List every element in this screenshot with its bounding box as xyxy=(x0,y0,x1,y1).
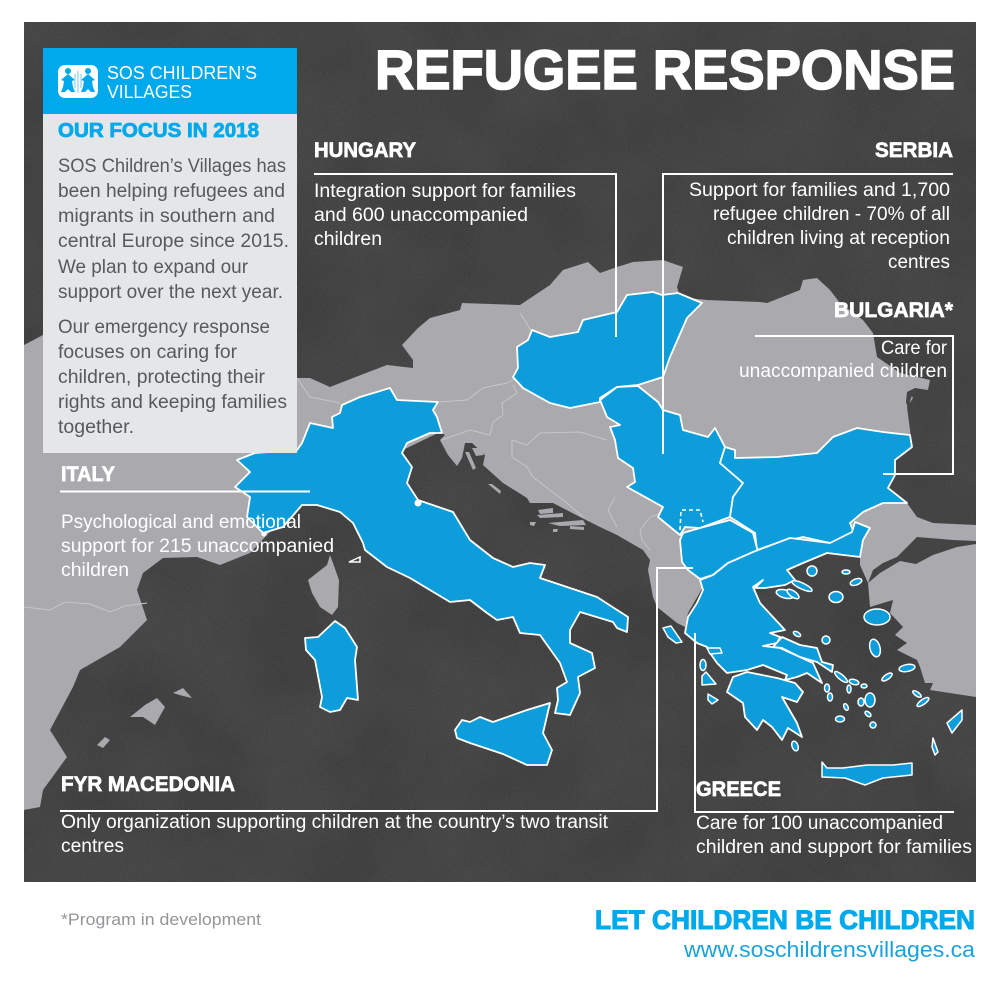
callout: Greece: children and support for families xyxy=(696,837,972,858)
grey land mass xyxy=(24,260,976,810)
intro paragraph: We plan to expand our xyxy=(58,257,249,278)
callout: Bulgaria: unaccompanied children xyxy=(739,361,947,382)
callout: FYR Macedonia: FYR MACEDONIA xyxy=(61,773,235,796)
callout: FYR Macedonia: centres xyxy=(61,836,124,857)
organisation name: SOS CHILDREN’S xyxy=(107,63,257,83)
Elba xyxy=(349,557,360,562)
Corsica xyxy=(308,555,339,615)
callout: Serbia xyxy=(663,139,953,454)
tagline: LET CHILDREN BE CHILDREN xyxy=(595,905,975,935)
callout: FYR Macedonia xyxy=(60,568,693,857)
callout: FYR Macedonia: Only organization supporting children at the country’s two transit xyxy=(61,812,609,833)
emergency response paragraph xyxy=(58,317,287,438)
emergency response paragraph: Our emergency response xyxy=(58,317,270,338)
Greece mainland xyxy=(685,522,870,683)
intro paragraph xyxy=(58,156,289,303)
Venice and coast markers xyxy=(262,500,422,536)
Sea of Marmara xyxy=(868,537,976,583)
intro paragraph: SOS Children’s Villages has xyxy=(58,156,286,177)
Sardinia xyxy=(305,621,358,712)
map of southern and central Europe xyxy=(24,260,976,810)
Italy mainland xyxy=(235,388,628,715)
footnote: *Program in development xyxy=(61,910,261,929)
Peloponnese xyxy=(727,672,803,740)
callout: Hungary: Integration support for families xyxy=(314,181,576,202)
callout: Italy xyxy=(60,463,334,581)
emergency response paragraph: rights and keeping families xyxy=(58,392,287,413)
panel heading: OUR FOCUS IN 2018 xyxy=(58,119,259,142)
icon: SOS logo xyxy=(58,65,98,98)
Greek islands xyxy=(663,566,962,785)
emergency response paragraph: focuses on caring for xyxy=(58,342,238,363)
Euboea xyxy=(773,637,833,672)
title: REFUGEE RESPONSE xyxy=(375,38,955,101)
website: www.soschildrensvillages.ca xyxy=(683,937,976,962)
callout: Italy: support for 215 unaccompanied xyxy=(61,536,334,557)
callout: Hungary xyxy=(314,139,616,337)
Sicily xyxy=(455,703,552,765)
organisation name: VILLAGES xyxy=(107,82,192,102)
callout: Serbia: SERBIA xyxy=(875,139,953,162)
callout: Italy: ITALY xyxy=(61,463,115,486)
emergency response paragraph: children, protecting their xyxy=(58,367,266,388)
panel: our focus in 2018 xyxy=(43,48,297,453)
callout: Hungary: and 600 unaccompanied xyxy=(314,205,528,226)
Bulgaria xyxy=(720,428,912,550)
Adriatic islands xyxy=(465,448,586,532)
organisation name xyxy=(107,63,257,102)
logo band xyxy=(43,48,297,114)
callout: Greece xyxy=(695,633,972,858)
callout: Hungary: children xyxy=(314,229,382,250)
intro paragraph: support over the next year. xyxy=(58,282,283,303)
callout: Greece: Care for 100 unaccompanied xyxy=(696,813,943,834)
intro paragraph: central Europe since 2015. xyxy=(58,231,289,252)
callout: Italy: Psychological and emotional xyxy=(61,512,301,533)
emergency response paragraph: together. xyxy=(58,417,134,438)
intro paragraph: migrants in southern and xyxy=(58,206,275,227)
callout: Bulgaria: BULGARIA* xyxy=(834,299,954,322)
Serbia xyxy=(600,386,743,535)
panel background xyxy=(43,112,297,453)
callout: Greece: GREECE xyxy=(696,778,781,801)
callout: Serbia: Support for families and 1,700 xyxy=(689,180,950,201)
Kosovo dashed outline xyxy=(680,510,703,530)
intro paragraph: been helping refugees and xyxy=(58,181,285,202)
callout: Serbia: centres xyxy=(888,252,950,273)
callout: Bulgaria: Care for xyxy=(881,338,948,359)
North Macedonia xyxy=(680,520,758,579)
callout: Serbia: refugee children - 70% of all xyxy=(713,204,950,225)
country borders xyxy=(24,313,662,612)
Balearic islands xyxy=(97,688,192,748)
callout: Bulgaria xyxy=(739,299,954,474)
callout: Hungary: HUNGARY xyxy=(314,139,416,162)
Danube delta inlet xyxy=(906,388,915,408)
Hungary xyxy=(513,292,702,408)
callout: Italy: children xyxy=(61,560,129,581)
callout: Serbia: children living at reception xyxy=(727,228,950,249)
